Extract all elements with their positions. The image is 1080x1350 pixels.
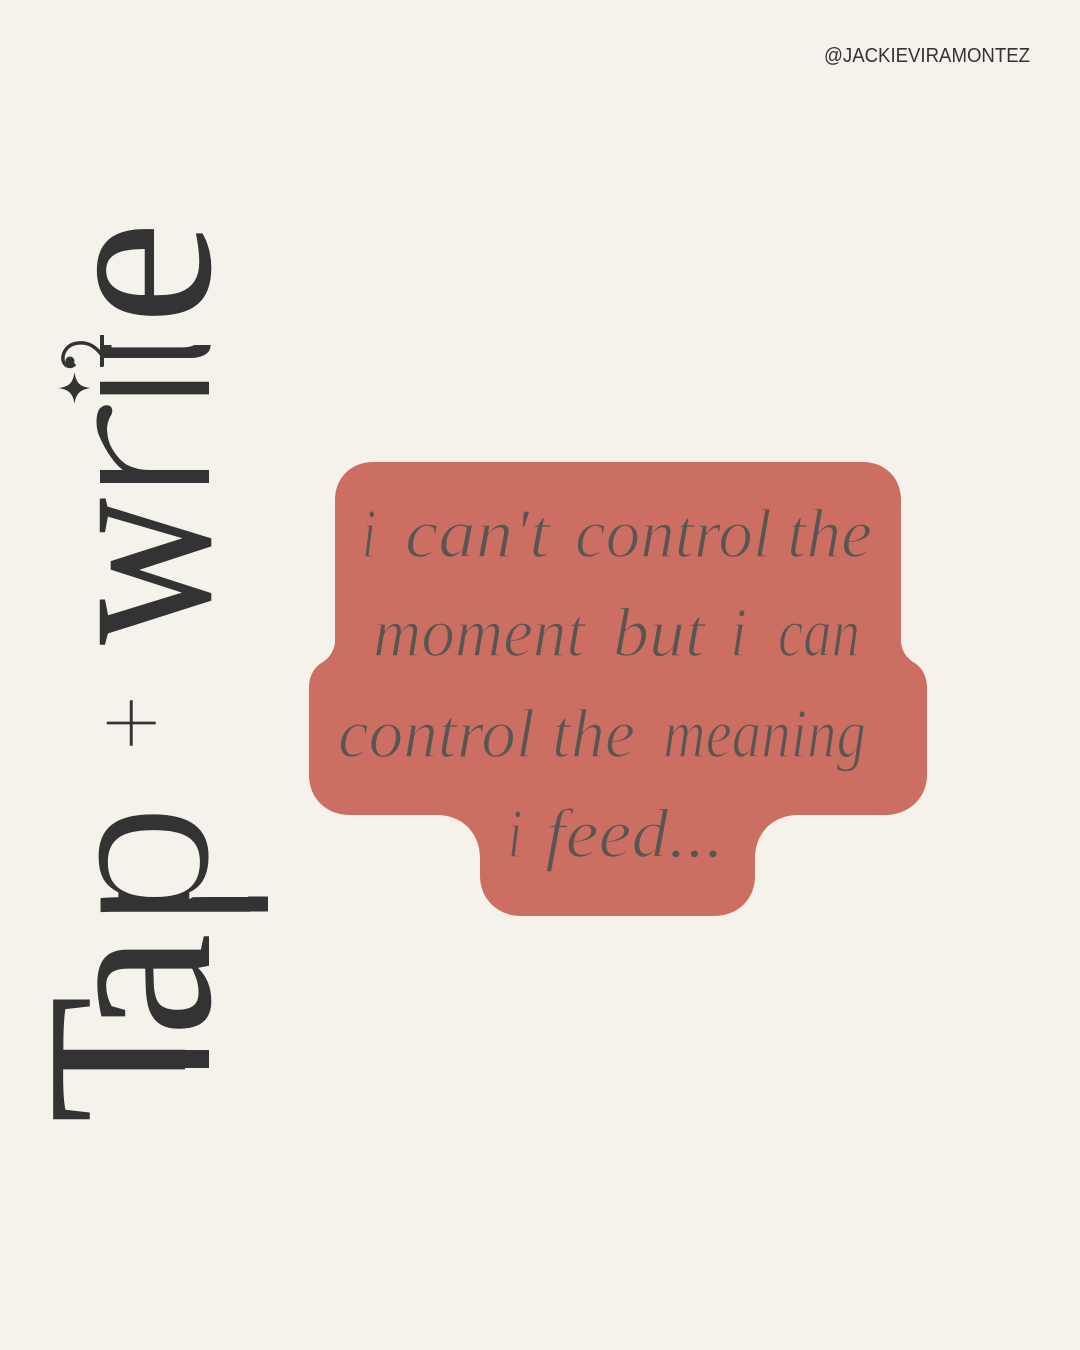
quote text [338, 496, 872, 873]
panel: quote shape [309, 462, 927, 916]
title: Tap + write (vertical): T [0, 996, 261, 1123]
quote text: the [552, 696, 635, 773]
title: Tap + write (vertical): a [0, 933, 261, 1037]
title: Tap + write (vertical) [0, 221, 268, 1123]
quote text: i [730, 595, 747, 672]
icon: sparkle [58, 372, 91, 404]
quote text: can [778, 595, 860, 672]
quote text: control [575, 496, 772, 573]
title: Tap + write (vertical): r [19, 406, 254, 511]
quote text: but [613, 595, 707, 672]
quote text: i [362, 496, 376, 573]
handle: @JACKIEVIRAMONTEZ [824, 45, 1030, 67]
quote text: feed... [545, 796, 724, 873]
quote text: control [338, 696, 535, 773]
quote text: moment [373, 595, 586, 672]
icon: t flourish [63, 343, 101, 366]
quote text: can't [405, 496, 552, 573]
title: Tap + write (vertical): i [19, 372, 254, 404]
title: Tap + write (vertical): w [0, 495, 261, 645]
title: Tap + write (vertical): p [19, 802, 254, 930]
quote text: the [787, 496, 872, 573]
title: Tap + write (vertical): e [0, 221, 261, 325]
quote text: i [508, 796, 522, 873]
title: Tap + write (vertical): + [70, 694, 192, 752]
quote text: meaning [663, 696, 866, 773]
title: Tap + write (vertical): t [19, 333, 254, 368]
